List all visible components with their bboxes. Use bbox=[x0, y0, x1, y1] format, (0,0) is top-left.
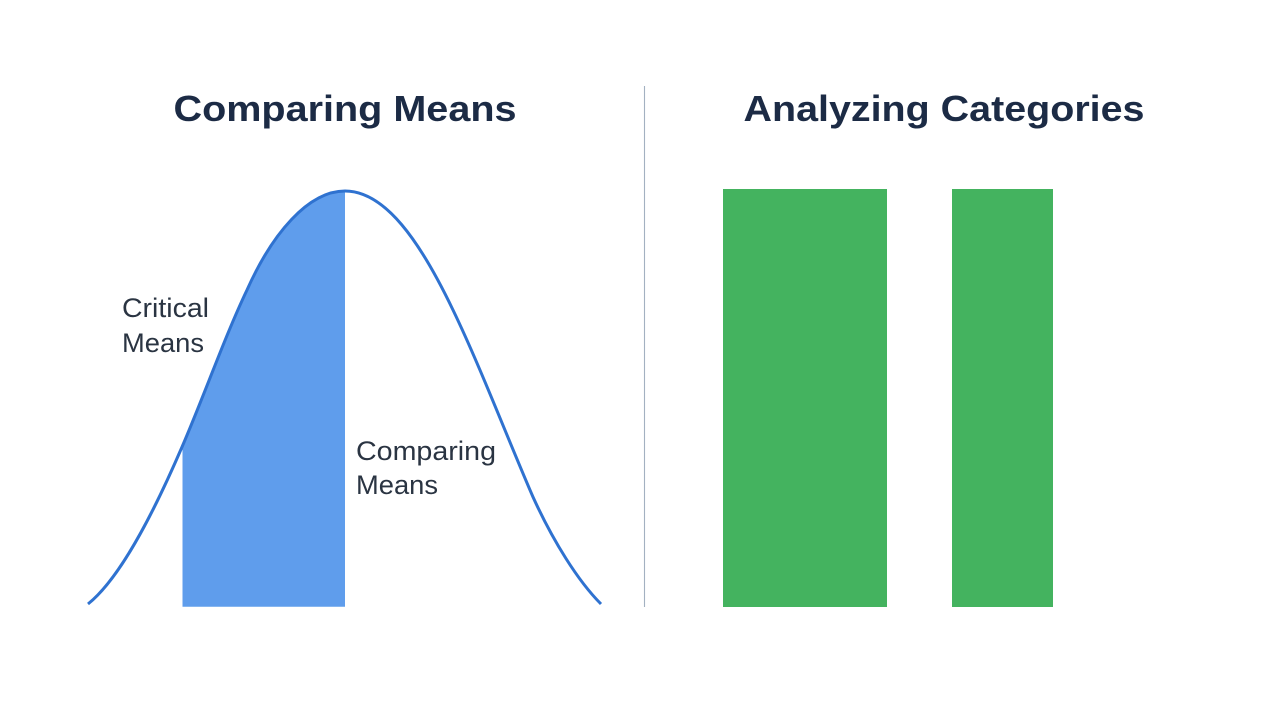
bar 2 bbox=[952, 189, 1053, 607]
curve line bbox=[88, 191, 601, 604]
chart: bell curve bbox=[88, 191, 601, 607]
label: Comparing Means: Means bbox=[356, 470, 438, 500]
chart: category bars bbox=[723, 189, 1053, 607]
label: Comparing Means: Comparing bbox=[356, 436, 496, 466]
bar 1 bbox=[723, 189, 887, 607]
label: Critical Means: Critical bbox=[122, 293, 209, 323]
heading: Comparing Means: Comparing Means bbox=[174, 88, 516, 129]
label: Critical Means: Means bbox=[122, 328, 204, 358]
shaded area under curve bbox=[182, 191, 345, 607]
panel divider bbox=[644, 86, 646, 607]
heading: Analyzing Categories: Analyzing Categories bbox=[744, 88, 1144, 129]
